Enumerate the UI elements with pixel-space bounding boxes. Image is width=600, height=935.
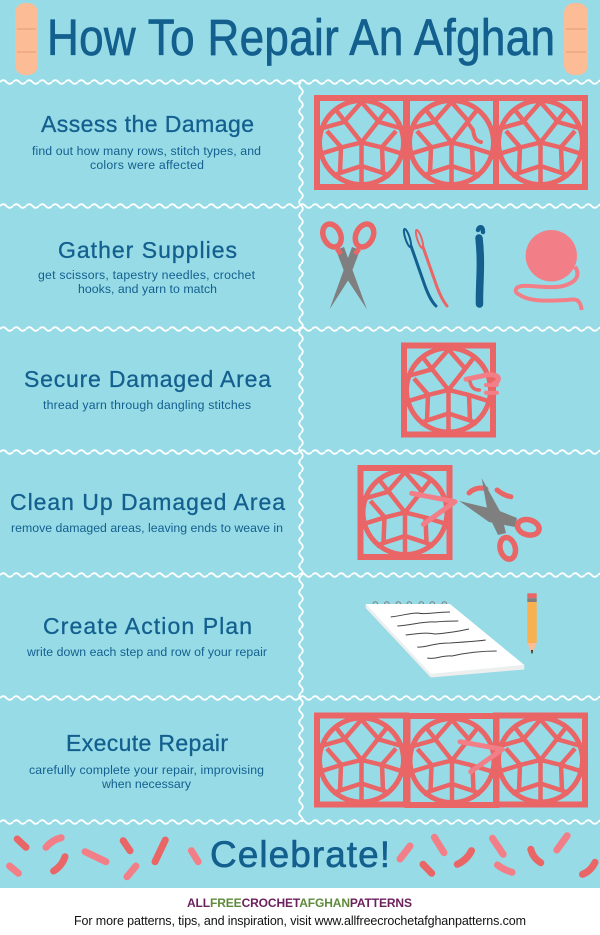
icon: afghan square with secured yarn bbox=[404, 346, 498, 434]
icon: tapestry needles bbox=[402, 228, 447, 306]
icon: left bandage bbox=[15, 3, 38, 75]
heading: Execute Repair bbox=[66, 730, 228, 756]
logo wordmark: ALLFREECROCHETAFGHANPATTERNS bbox=[187, 896, 412, 910]
icon: notepad bbox=[366, 602, 524, 678]
panel: secure damaged area bbox=[24, 346, 498, 434]
description: write down each step and row of your repair bbox=[26, 645, 267, 659]
stitched dividers bbox=[0, 79, 600, 825]
icon: scissors bbox=[319, 221, 377, 310]
footer bbox=[74, 896, 526, 928]
panel: clean up damaged area bbox=[10, 468, 541, 561]
icon: pencil bbox=[527, 593, 537, 654]
panel: celebrate bbox=[10, 834, 595, 877]
description: carefully complete your repair, improvising bbox=[29, 763, 264, 777]
heading: Create Action Plan bbox=[43, 613, 252, 639]
panel: create action plan bbox=[26, 593, 537, 678]
icon: afghan square with cut yarn bbox=[360, 468, 455, 557]
description bbox=[38, 268, 256, 296]
heading: Gather Supplies bbox=[58, 237, 237, 263]
title: How To Repair An Afghan bbox=[47, 10, 555, 67]
description: thread yarn through dangling stitches bbox=[43, 398, 251, 412]
sprinkles bbox=[10, 836, 595, 877]
icon: right bandage bbox=[564, 3, 588, 75]
panel: execute repair bbox=[29, 716, 585, 805]
description bbox=[32, 144, 261, 172]
description bbox=[29, 763, 264, 791]
panel: assess the damage bbox=[32, 98, 585, 187]
description: get scissors, tapestry needles, crochet bbox=[38, 268, 256, 282]
icon: repaired afghan strip bbox=[317, 716, 585, 805]
icon: crochet hook bbox=[478, 227, 483, 304]
panel: gather supplies bbox=[38, 221, 582, 310]
icon: three afghan squares with a loose stitch bbox=[317, 98, 585, 187]
heading: Secure Damaged Area bbox=[24, 366, 271, 392]
footer note: For more patterns, tips, and inspiration, visit www.allfreecrochetafghanpatterns.com bbox=[74, 914, 526, 928]
description: find out how many rows, stitch types, and bbox=[32, 144, 261, 158]
description: colors were affected bbox=[90, 158, 204, 172]
icon: scissors cutting bbox=[459, 478, 541, 561]
heading: Celebrate! bbox=[210, 834, 390, 875]
description: hooks, and yarn to match bbox=[78, 282, 217, 296]
icon: cut yarn pieces bbox=[469, 488, 511, 497]
heading: Assess the Damage bbox=[41, 111, 254, 137]
heading: Clean Up Damaged Area bbox=[10, 489, 285, 515]
description: when necessary bbox=[101, 777, 192, 791]
description: remove damaged areas, leaving ends to weave in bbox=[11, 521, 283, 535]
icon: ball of yarn bbox=[516, 230, 582, 310]
